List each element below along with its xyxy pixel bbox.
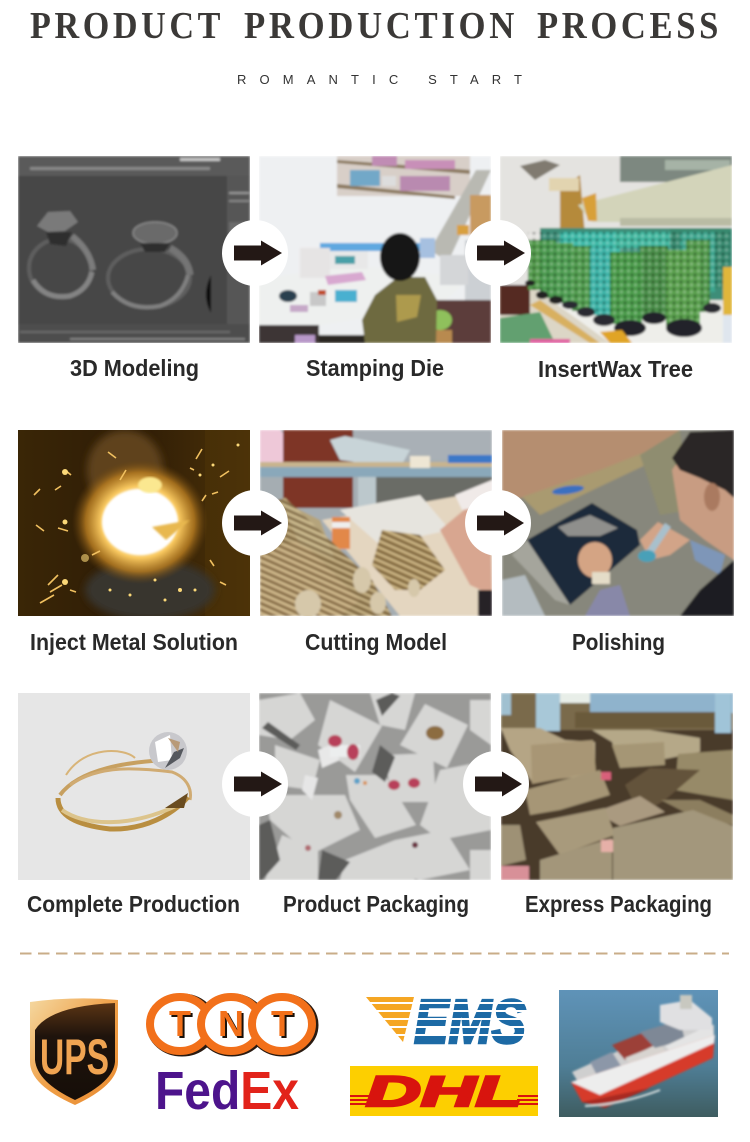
photo: finished gold ring with diamond: [18, 693, 250, 880]
arrow: cutting to polishing: [465, 490, 531, 556]
label: 3D Modeling: 3D Modeling: [70, 355, 199, 381]
arrow: stamping to wax tree: [465, 220, 531, 286]
title: PROCESS: [537, 5, 722, 47]
photo: workers cutting gold casting trees: [260, 430, 492, 618]
subtitle: ROMANTIC START: [237, 72, 522, 87]
logo: EMS: [360, 988, 530, 1057]
label: Stamping Die: Stamping Die: [306, 355, 444, 381]
label: Product Packaging: Product Packaging: [283, 891, 469, 917]
arrow: product to express packaging: [463, 751, 529, 817]
photo: warehouse with express cardboard boxes: [501, 693, 733, 880]
arrow: modeling to stamping: [222, 220, 288, 286]
title: [30, 5, 722, 47]
label: Polishing: Polishing: [572, 629, 665, 655]
logo: EMS: EMS: [414, 988, 526, 1057]
title: PRODUCT: [30, 5, 224, 47]
label: Inject Metal Solution: Inject Metal Solution: [30, 629, 238, 655]
logo: TNT: N: [218, 1003, 244, 1044]
title: PRODUCTION: [244, 5, 518, 47]
logo: UPS shield: [30, 998, 118, 1105]
arrow: complete to product packaging: [222, 751, 288, 817]
photo: worker polishing jewellery: [502, 430, 734, 616]
photo: stamping die workshop with seated worker: [259, 156, 491, 343]
logo: TNT: N: [220, 1005, 246, 1046]
label: Cutting Model: Cutting Model: [305, 629, 447, 655]
label: Complete Production: Complete Production: [27, 891, 240, 917]
label: InsertWax Tree: InsertWax Tree: [538, 356, 693, 382]
logo: TNT: T: [171, 1005, 193, 1046]
arrow: inject to cutting: [222, 490, 288, 556]
logo: TNT: [150, 997, 314, 1052]
logo: UPS shield: UPS: [40, 1029, 109, 1085]
photo: jewellery in plastic packaging bags: [259, 693, 491, 880]
logo: FedEx: FedEx: [155, 1061, 299, 1121]
logo: DHL: DHL: [366, 1068, 522, 1116]
logo: TNT: T: [169, 1003, 191, 1044]
photo: container ship at sea: [559, 990, 718, 1117]
label: Express Packaging: Express Packaging: [525, 891, 712, 917]
photo: molten metal with sparks: [18, 430, 250, 620]
logo: DHL: [350, 1066, 538, 1116]
photo: 3D modeling software with two rings: [18, 156, 250, 343]
photo: wax trees on workbench: [500, 156, 732, 343]
logo: TNT: T: [273, 1005, 295, 1046]
logo: TNT: T: [271, 1003, 293, 1044]
